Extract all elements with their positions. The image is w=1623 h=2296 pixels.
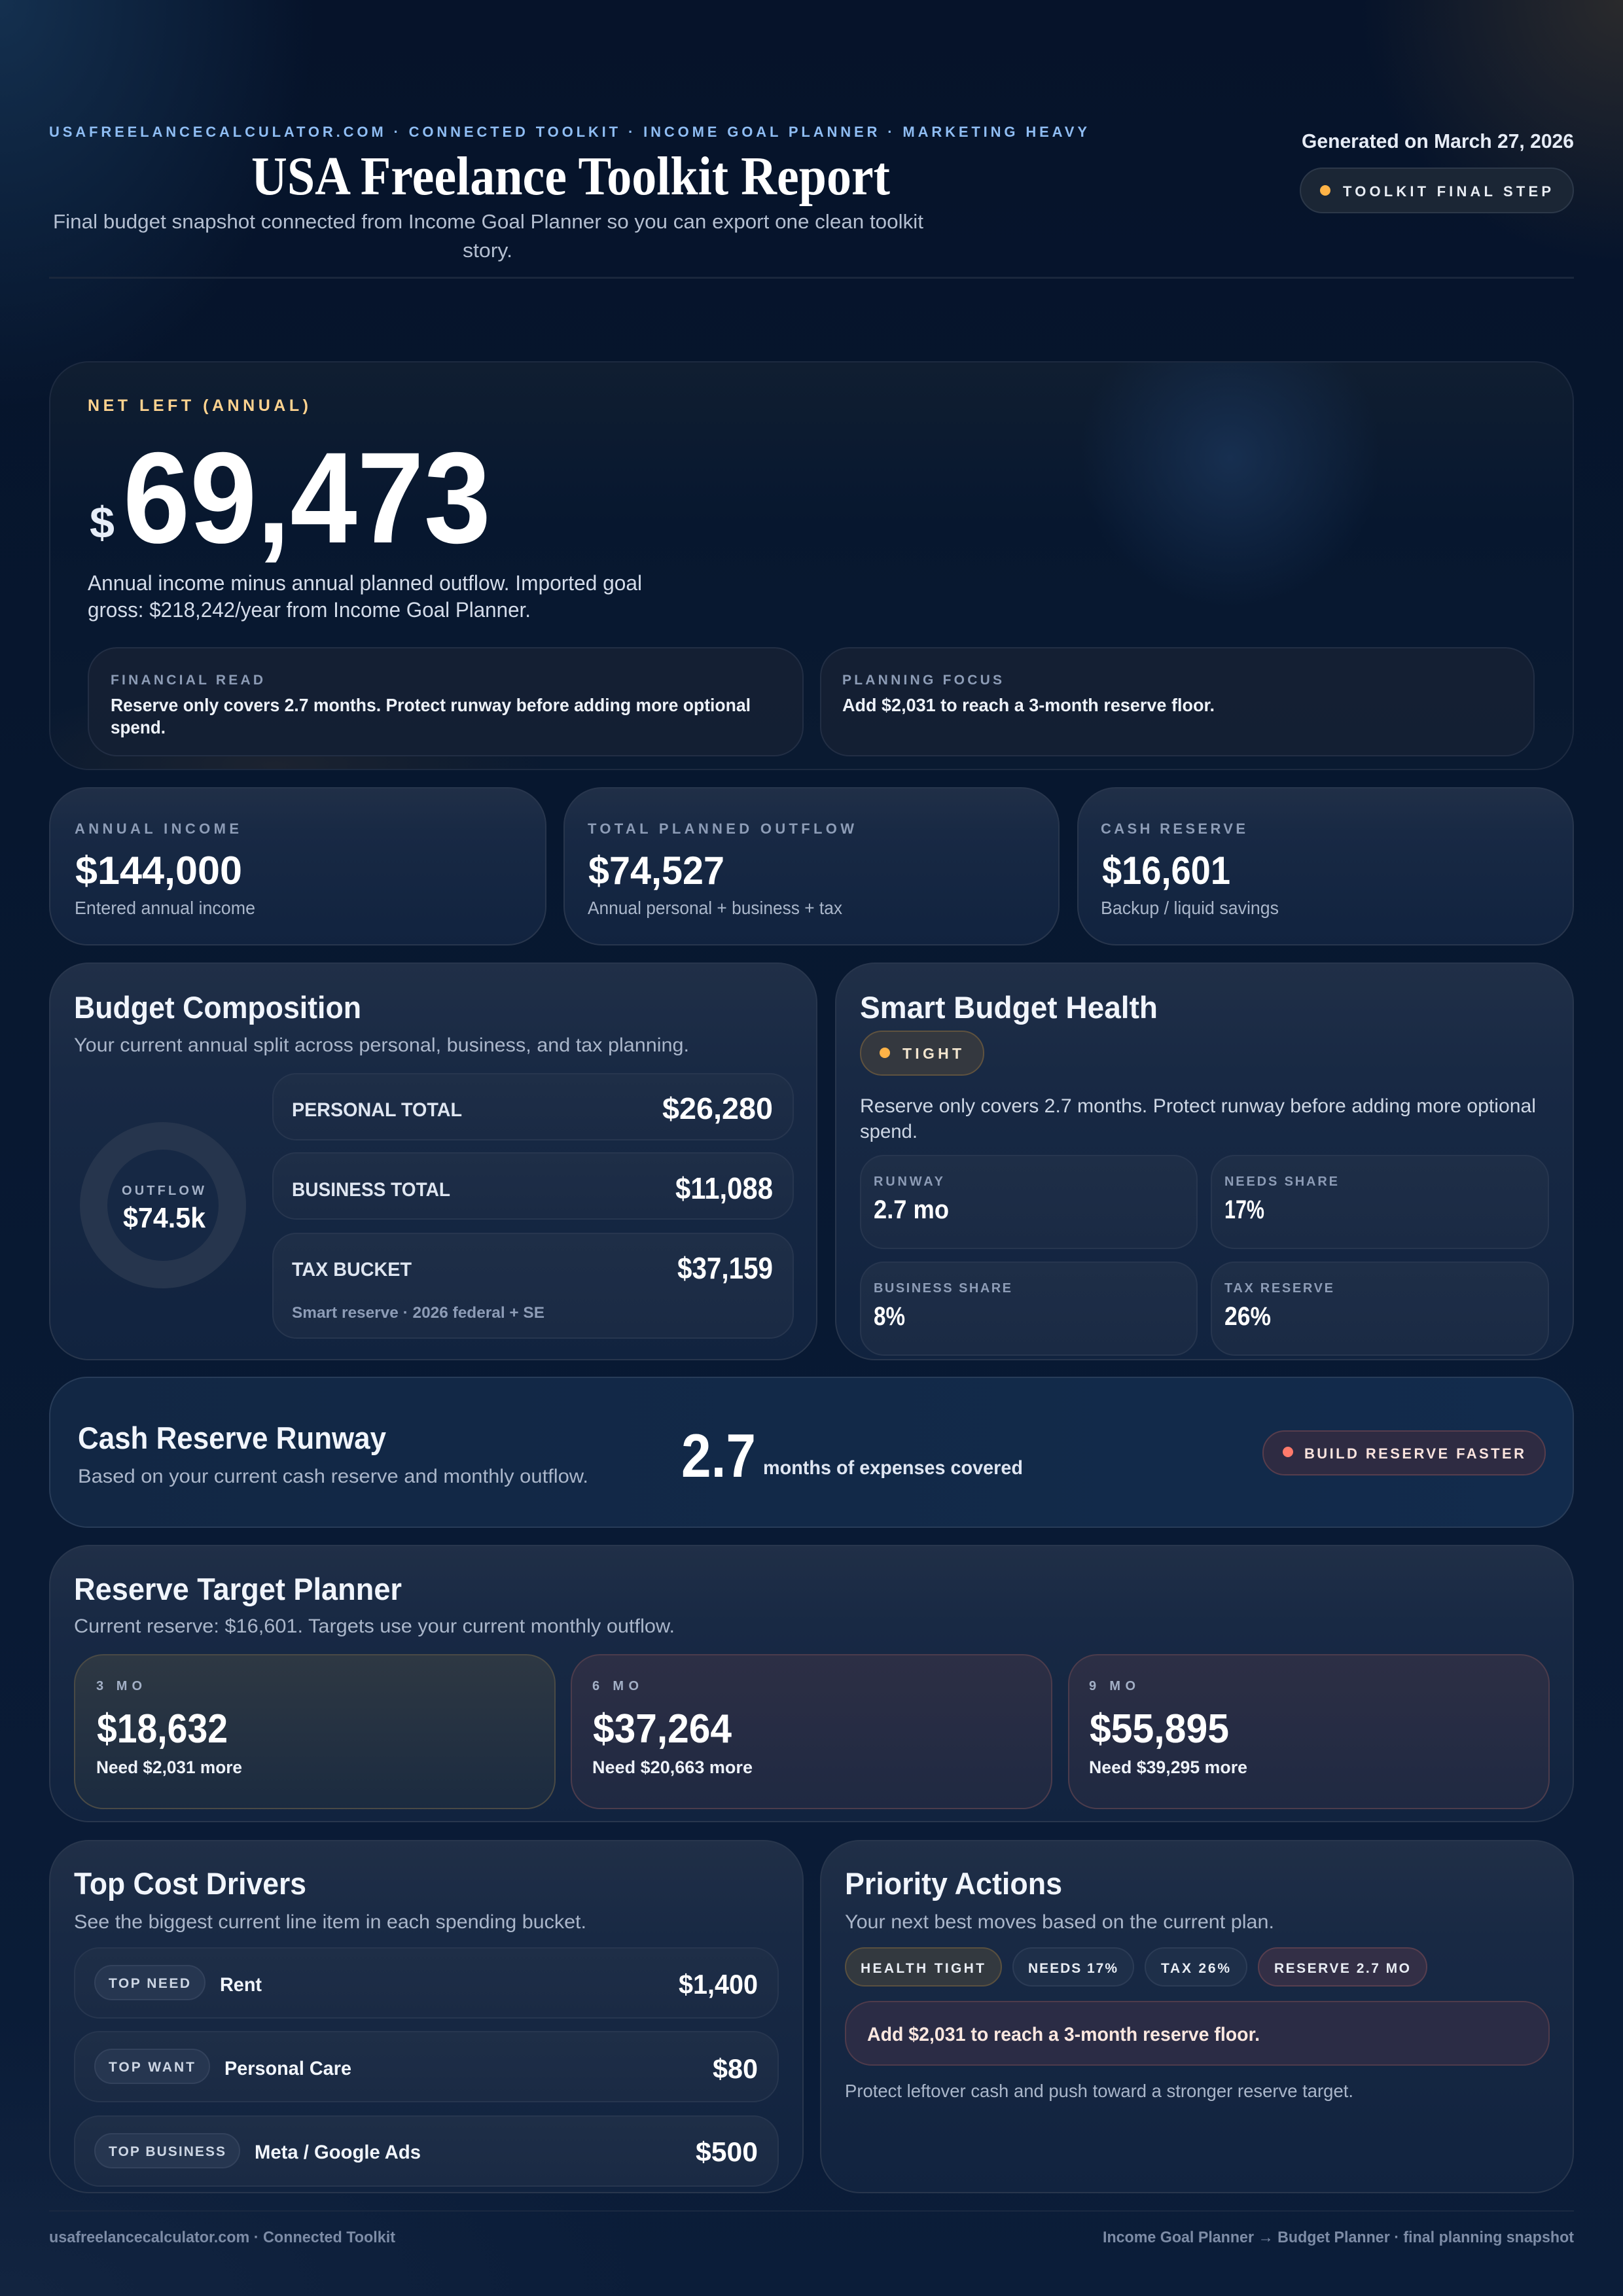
row: tax bucket: TAX BUCKET [292,1259,412,1280]
footer right: Income Goal Planner → Budget Planner · final planning snapshot [1103,2229,1574,2246]
row: business total: BUSINESS TOTAL [292,1179,450,1201]
tile: runway: 2.7 mo [874,1195,949,1224]
card: 9 month target [1069,1655,1549,1809]
card: 3 month target [75,1655,555,1809]
card: 6 month target [571,1655,1052,1809]
row: tax bucket [273,1233,793,1338]
panel: cash reserve runway [50,1377,1573,1527]
callout [846,2002,1549,2065]
heading: Top Cost Drivers [74,1866,306,1901]
stat: annual income: Entered annual income [75,898,255,918]
subheading: See the biggest current line item in each spending bucket. [74,1911,586,1933]
status pill: tight [861,1031,984,1075]
donut: outflow [94,1136,232,1275]
stat: annual income: ANNUAL INCOME [75,821,239,837]
panel: top cost drivers [50,1841,803,2193]
row: top want: $80 [713,2053,758,2084]
header divider [49,277,1574,279]
tile: business share: 8% [874,1302,905,1331]
health description [860,1095,1536,1142]
pill: build reserve faster: BUILD RESERVE FASTER [1304,1445,1524,1462]
tile: runway [861,1156,1197,1248]
subtitle: Final budget snapshot connected from Income Goal Planner so you can export one clean toolkit [53,210,923,233]
health description: Reserve only covers 2.7 months. Protect runway before adding more optional [860,1095,1536,1117]
net left value: 69,473 [123,425,491,570]
card: financial read: spend. [111,717,166,737]
subtitle [53,210,923,262]
subheading: Based on your current cash reserve and monthly outflow. [78,1466,588,1487]
subtitle: story. [463,239,512,262]
row: top need: Rent [220,1974,262,1996]
stat: cash reserve: Backup / liquid savings [1101,898,1279,918]
stat: total planned outflow [564,788,1059,945]
health description: spend. [860,1121,918,1142]
stat: cash reserve [1078,788,1573,945]
row: top need [75,1948,778,2018]
card: 3 month target: $18,632 [97,1706,228,1752]
row: top need: TOP NEED [109,1976,190,1991]
panel: net left hero [50,362,1573,769]
stat: cash reserve: CASH RESERVE [1101,821,1245,837]
tile: needs share: NEEDS SHARE [1224,1174,1338,1189]
stat: cash reserve: $16,601 [1102,849,1230,892]
heading: Priority Actions [845,1866,1062,1901]
chip: tax: TAX 26% [1161,1961,1230,1976]
footer [49,2210,1574,2246]
stat: total planned outflow: TOTAL PLANNED OUTFLOW [588,821,854,837]
row: personal total [273,1074,793,1140]
heading: Budget Composition [74,990,361,1025]
row: top business: Meta / Google Ads [255,2142,421,2163]
row: personal total: $26,280 [662,1091,773,1125]
heading: Smart Budget Health [860,990,1158,1025]
chip: reserve [1258,1948,1427,1986]
card: 6 month target: $37,264 [593,1706,732,1752]
card: 3 month target: Need $2,031 more [96,1757,242,1777]
stat: annual income [50,788,546,945]
donut: outflow: $74.5k [123,1202,205,1234]
card: financial read: FINANCIAL READ [111,673,263,688]
stat: total planned outflow: Annual personal + business + tax [588,898,842,918]
tile: tax reserve: 26% [1224,1302,1271,1331]
row: top want: TOP WANT [109,2060,194,2075]
card: financial read [88,648,803,756]
tile: tax reserve [1211,1262,1548,1355]
stat: annual income: $144,000 [75,849,242,892]
tile: business share [861,1262,1197,1355]
heading: Reserve Target Planner [74,1572,402,1606]
chip: needs: NEEDS 17% [1028,1961,1117,1976]
net left description: Annual income minus annual planned outflow. Imported goal [88,571,642,595]
row: tax bucket: $37,159 [677,1251,773,1285]
tile: runway: RUNWAY [874,1174,944,1189]
tile: tax reserve: TAX RESERVE [1224,1281,1333,1296]
card: planning focus [821,648,1534,756]
status pill: tight: TIGHT [902,1045,961,1062]
net left value: $ [90,498,115,548]
row: top want [75,2032,778,2102]
pill: build reserve faster [1263,1431,1545,1475]
pill: toolkit final step: TOOLKIT FINAL STEP [1343,183,1551,200]
card: 6 month target: 6 MO [592,1679,639,1693]
card: 9 month target: 9 MO [1089,1679,1135,1693]
chip: tax [1145,1948,1247,1986]
card: 9 month target: $55,895 [1090,1706,1229,1752]
row: tax bucket: Smart reserve · 2026 federal + SE [292,1304,544,1322]
row: top business: $500 [696,2136,758,2167]
eyebrow: USAFREELANCECALCULATOR.COM · CONNECTED TOOLKIT · INCOME GOAL PLANNER · MARKETING HEAVY [49,124,1087,140]
runway value: 2.7 [681,1421,756,1490]
chip: health tight: HEALTH TIGHT [861,1961,984,1976]
row: business total [273,1153,793,1219]
runway value: months of expenses covered [763,1457,1023,1479]
card: planning focus: PLANNING FOCUS [842,673,1002,688]
card: financial read: Reserve only covers 2.7 months. Protect runway before adding more optional [111,695,751,715]
subheading: Your current annual split across personal, business, and tax planning. [74,1034,689,1056]
panel: priority actions [821,1841,1573,2193]
chip: reserve: RESERVE 2.7 MO [1274,1961,1410,1976]
row: business total: $11,088 [675,1171,773,1205]
generated date: Generated on March 27, 2026 [1302,130,1574,152]
row: personal total: PERSONAL TOTAL [292,1099,462,1121]
pill: toolkit final step [1300,168,1573,213]
chip: health tight [846,1948,1001,1986]
net left description [88,571,642,622]
callout: Add $2,031 to reach a 3-month reserve floor. [867,2024,1260,2045]
row: top business [75,2116,778,2186]
title: USA Freelance Toolkit Report [251,146,890,207]
row: top want: Personal Care [224,2058,351,2079]
header [49,124,1574,279]
card: 3 month target: 3 MO [96,1679,142,1693]
net left description: gross: $218,242/year from Income Goal Planner. [88,598,531,622]
row: top need: $1,400 [679,1969,758,2000]
heading: Cash Reserve Runway [78,1421,386,1455]
action note: Protect leftover cash and push toward a stronger reserve target. [845,2081,1353,2101]
tile: business share: BUSINESS SHARE [874,1281,1011,1296]
stat: total planned outflow: $74,527 [588,849,724,892]
panel: smart budget health [836,963,1573,1360]
panel: reserve target planner [50,1545,1573,1822]
card: 6 month target: Need $20,663 more [592,1757,753,1777]
tile: needs share: 17% [1224,1195,1264,1224]
card: planning focus: Add $2,031 to reach a 3-month reserve floor. [842,695,1215,715]
panel: budget composition [50,963,817,1360]
tile: needs share [1211,1156,1548,1248]
chip: needs [1013,1948,1133,1986]
footer left: usafreelancecalculator.com · Connected Toolkit [49,2229,395,2246]
net left label: NET LEFT (ANNUAL) [88,397,308,415]
row: top business: TOP BUSINESS [109,2144,225,2159]
subheading: Current reserve: $16,601. Targets use your current monthly outflow. [74,1616,675,1637]
donut: outflow: OUTFLOW [122,1184,204,1198]
card: 9 month target: Need $39,295 more [1089,1757,1247,1777]
runway value [681,1421,1023,1490]
subheading: Your next best moves based on the current plan. [845,1911,1274,1933]
